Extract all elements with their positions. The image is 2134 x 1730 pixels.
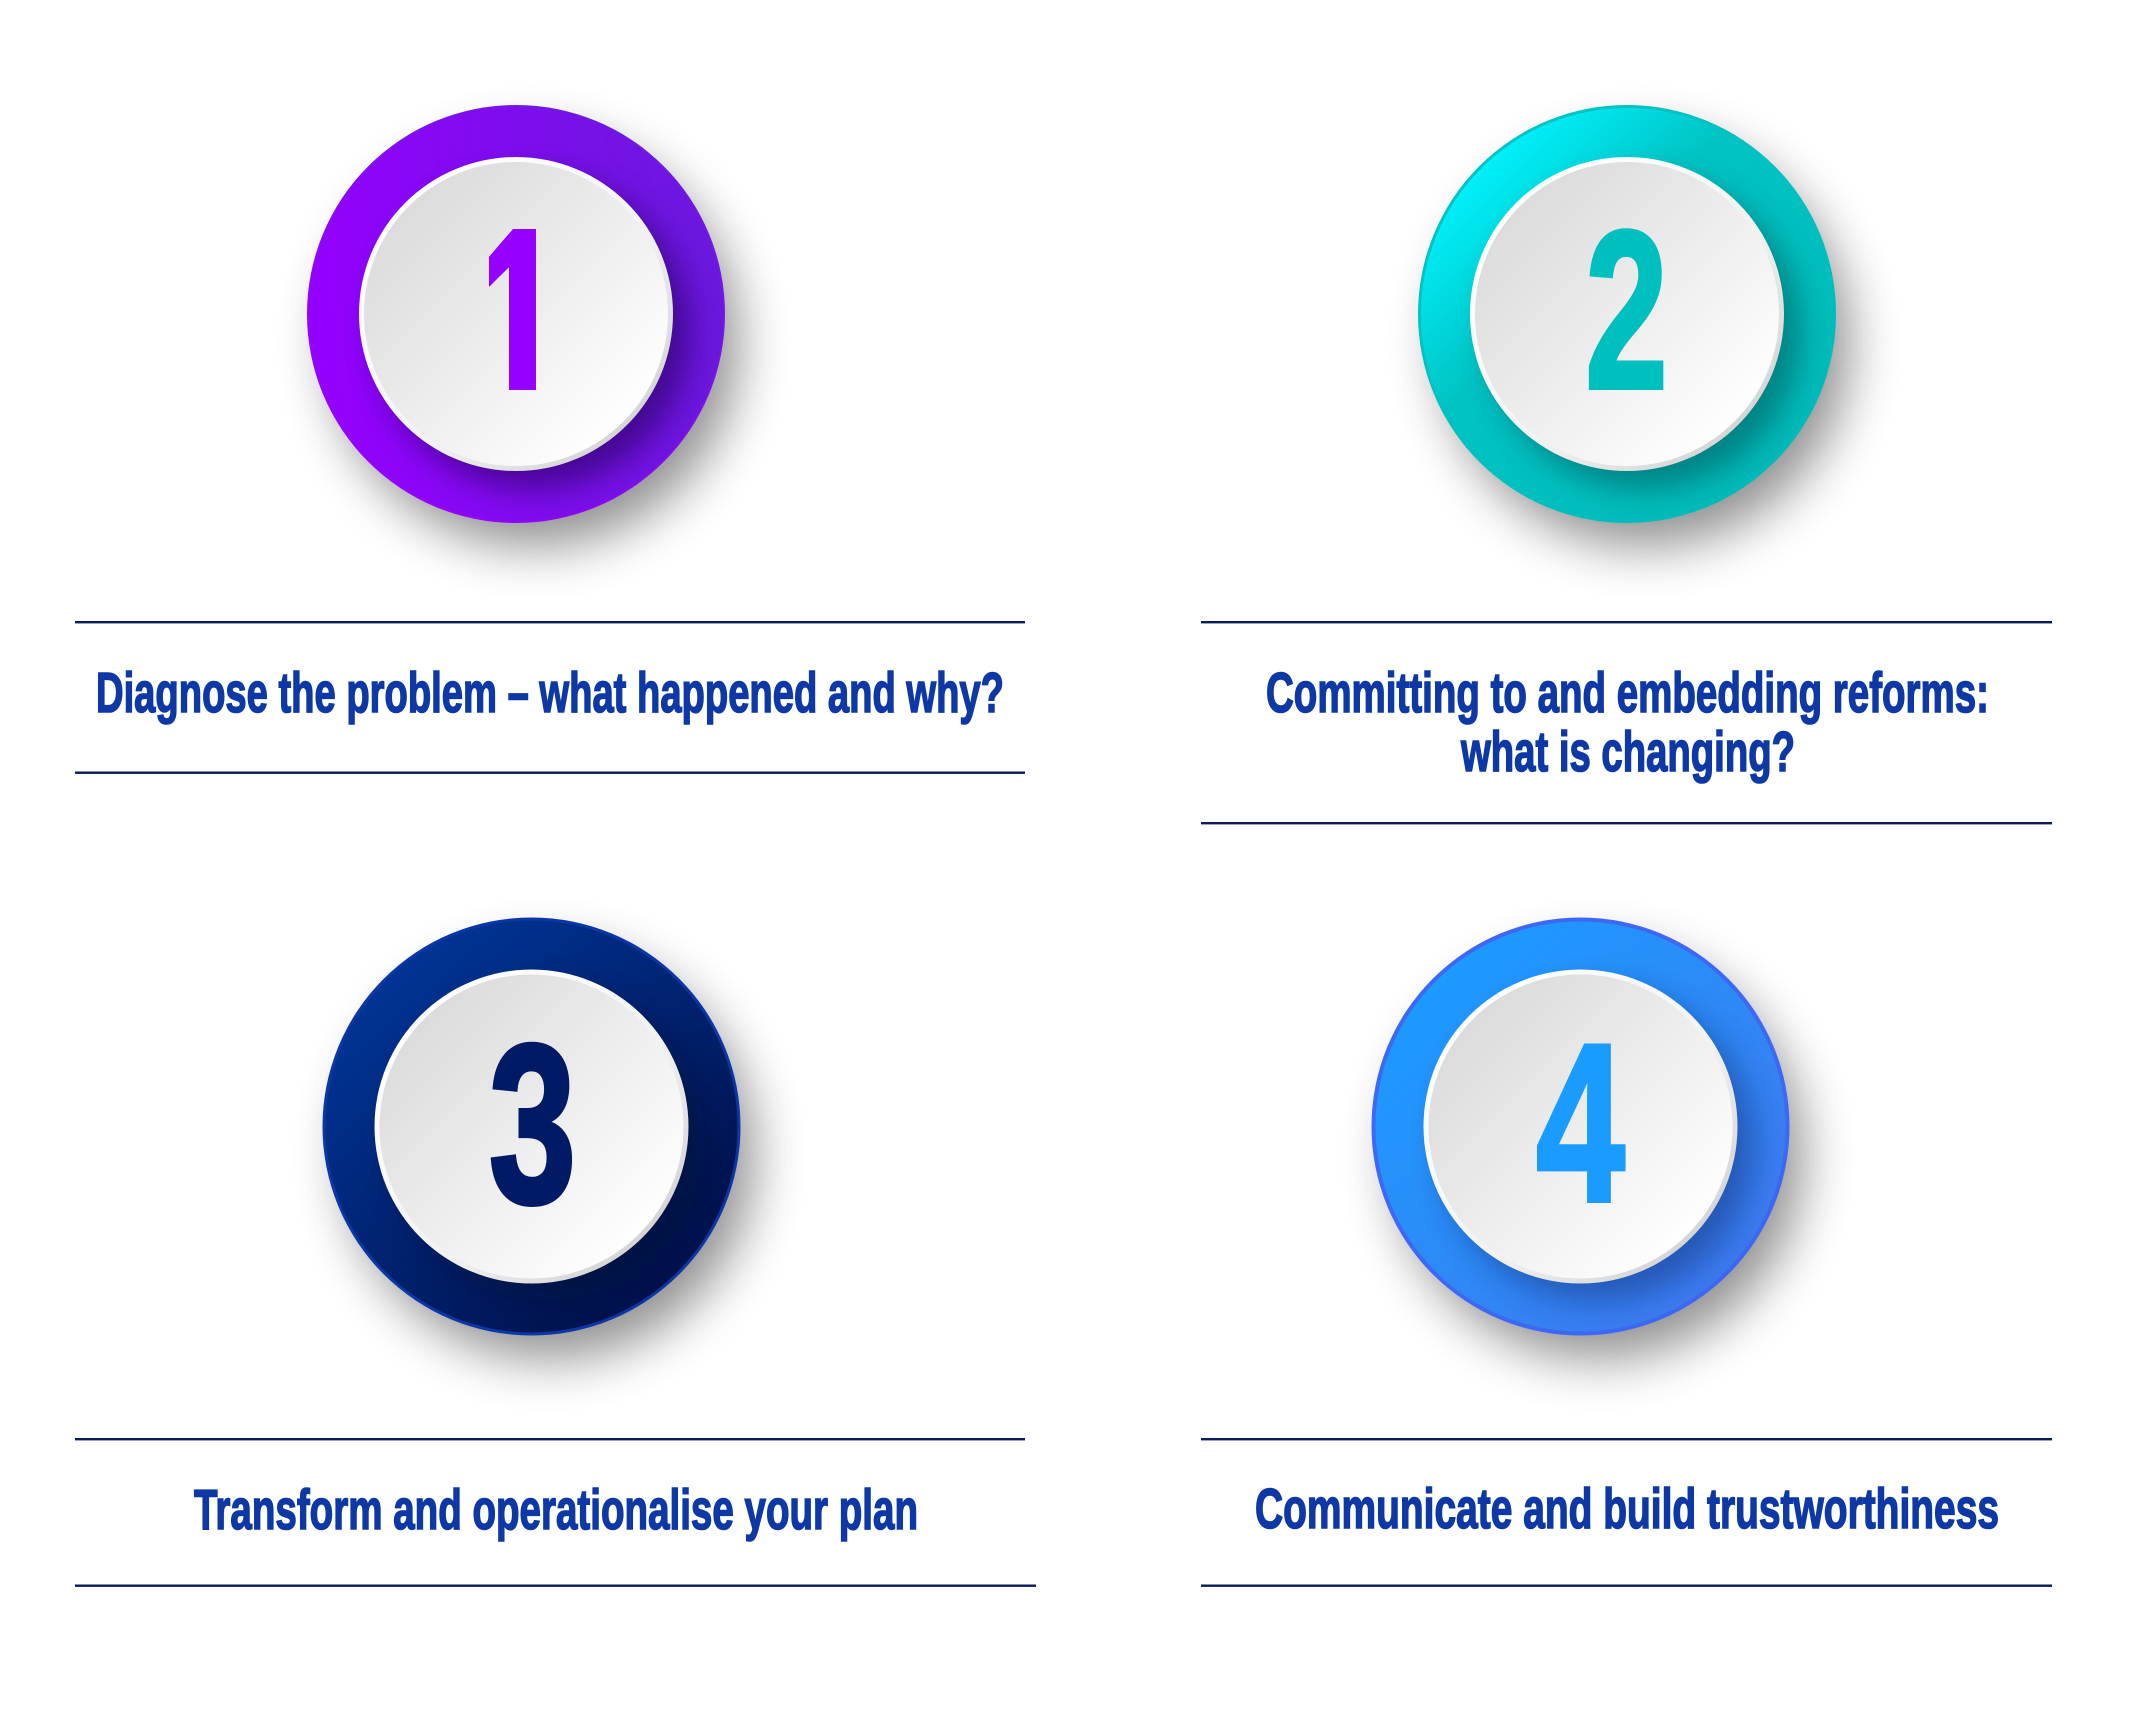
heading: step 2: what is changing? — [1460, 720, 1795, 784]
heading: step 1: Diagnose the problem – what happened and why? — [96, 661, 1004, 725]
digit 2: 2 — [1585, 183, 1668, 436]
digit 4: 4 — [1536, 996, 1625, 1249]
badge: number 3 — [322, 918, 754, 1358]
heading: step 2 — [1266, 661, 1989, 784]
heading: step 3: Transform and operationalise your plan — [194, 1478, 918, 1542]
badge: number 2 — [1418, 105, 1849, 546]
digit 3: 3 — [489, 997, 576, 1250]
digit 1: 1 — [448, 189, 572, 442]
panel: step 3 — [75, 918, 1036, 1587]
panel: step 4 — [1201, 918, 2052, 1587]
badge: number 1 — [307, 105, 738, 546]
panel: step 1 — [75, 105, 1025, 774]
panel: step 2 — [1201, 105, 2052, 824]
badge: number 4 — [1372, 918, 1802, 1358]
